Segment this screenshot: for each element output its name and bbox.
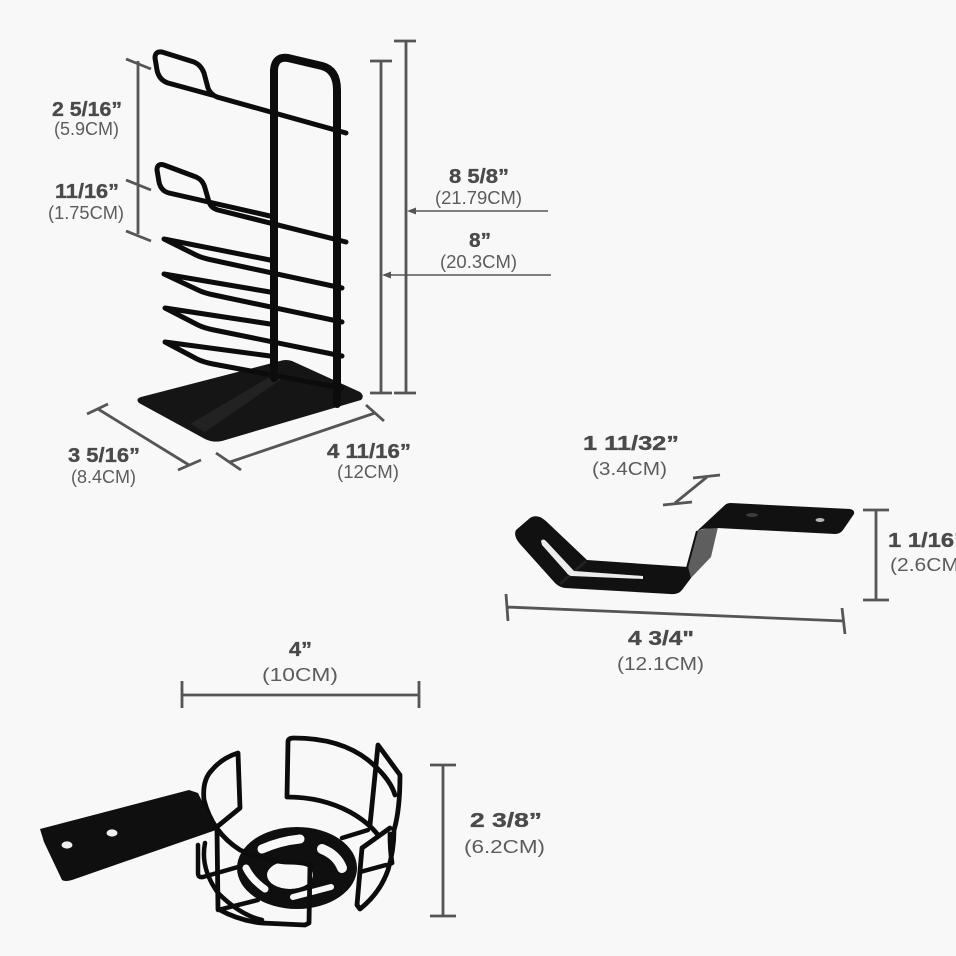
dimension: 8 5/8 label bbox=[435, 166, 522, 208]
dimension: left vertical spacing bracket bbox=[126, 59, 151, 241]
dimension: 4 3/4 label bbox=[617, 628, 704, 674]
dimension: 2 3/8 label bbox=[464, 810, 545, 857]
bracket side fold edge bbox=[687, 531, 697, 568]
dimension: 3 5/16 label bbox=[68, 445, 140, 487]
dimension: 3 5/16 label: 3 5/16” bbox=[68, 445, 140, 467]
dimension: base depth line bbox=[87, 404, 201, 470]
dimension: 2 5/16 label: 2 5/16” bbox=[52, 99, 122, 121]
dimension: 11/16 label: (1.75CM) bbox=[48, 203, 124, 223]
cup far-right wire frame bbox=[357, 745, 400, 909]
cup mounting plate bbox=[40, 790, 216, 881]
dimension: cup height line bbox=[430, 765, 456, 916]
disk centre hole bbox=[267, 861, 313, 889]
dimension: 8 5/8 label: (21.79CM) bbox=[435, 188, 522, 208]
dimension: 1 1/16 label: 1 1/16” bbox=[888, 530, 956, 552]
rack tray 2 bbox=[164, 274, 342, 322]
dimension: 2 3/8 label: 2 3/8” bbox=[470, 810, 542, 832]
dimension: 1 11/32 label bbox=[583, 433, 679, 479]
rack base plate bbox=[137, 360, 363, 442]
rack tray 4 bbox=[165, 342, 342, 388]
dimension: 8 5/8 label: 8 5/8” bbox=[449, 166, 509, 188]
cup rear wires bbox=[198, 830, 386, 920]
dimension: 8 5/8 inch height line bbox=[394, 41, 416, 393]
dimension: 2 3/8 label: (6.2CM) bbox=[464, 837, 545, 857]
dimension: 1 11/32 label: 1 11/32” bbox=[583, 433, 679, 455]
cup front-left wire frame bbox=[204, 753, 310, 925]
rack hanger 1 bbox=[155, 52, 346, 133]
dimension: 4 11/16 label: 4 11/16” bbox=[327, 441, 411, 463]
base reflection bbox=[190, 378, 283, 432]
dimension: 4 11/16 label: (12CM) bbox=[337, 462, 399, 482]
rack tray 1 bbox=[164, 239, 342, 288]
dimension: base width line bbox=[216, 405, 384, 470]
rack upright frame bbox=[274, 58, 337, 404]
dimension: 4 3/4 label: 4 3/4" bbox=[628, 628, 694, 650]
dimension: 4 label: (10CM) bbox=[262, 665, 338, 685]
rack tray 3 bbox=[165, 308, 342, 356]
dimension: 4 label bbox=[262, 639, 338, 685]
product: wire cup holder bbox=[40, 738, 400, 925]
dimension: 8 label: (20.3CM) bbox=[440, 252, 517, 272]
dimension: 4 3/4 label: (12.1CM) bbox=[617, 654, 704, 674]
plate holes bbox=[62, 829, 118, 849]
dimension: 1 1/16 label: (2.6CM) bbox=[890, 555, 956, 575]
dimension: 2 5/16 label: (5.9CM) bbox=[54, 119, 119, 139]
dimension: 4 label: 4” bbox=[289, 639, 312, 661]
dimension: bracket height line bbox=[863, 510, 889, 600]
cup base disk bbox=[237, 827, 357, 909]
dimension: 8 label: 8” bbox=[469, 230, 491, 252]
dimension: 3 5/16 label: (8.4CM) bbox=[71, 467, 136, 487]
dimension: 1 11/32 slanted line bbox=[663, 475, 720, 505]
bracket slot bbox=[541, 540, 643, 579]
bracket upper plate bbox=[697, 503, 854, 534]
bracket lower plate bbox=[515, 516, 691, 594]
dimension: 4 11/16 label bbox=[327, 441, 411, 482]
dimension: 8 label bbox=[440, 230, 517, 272]
dimension: 1 1/16 label bbox=[888, 530, 956, 575]
product: bent metal bracket bbox=[515, 503, 854, 594]
dimension: cup width line bbox=[182, 681, 419, 708]
dimension: 2 5/16 label bbox=[52, 99, 122, 139]
arrow: 8 leader bbox=[382, 272, 551, 278]
cup rear-right wire frame bbox=[287, 738, 395, 835]
dimension: 11/16 label: 11/16” bbox=[55, 181, 119, 203]
dimension: 1 11/32 label: (3.4CM) bbox=[592, 459, 667, 479]
dimension: bracket width line bbox=[506, 594, 845, 634]
arrow: 8 5/8 leader bbox=[407, 208, 548, 214]
product: wire rack on base bbox=[137, 52, 363, 442]
dimension: 11/16 label bbox=[48, 181, 124, 223]
dimension: 8 inch height line bbox=[370, 60, 392, 393]
bracket side face bbox=[687, 527, 718, 579]
bracket holes bbox=[746, 513, 824, 522]
bracket fold shading bbox=[560, 561, 586, 584]
disk slots bbox=[246, 839, 342, 897]
rack hanger 2 bbox=[157, 165, 346, 242]
